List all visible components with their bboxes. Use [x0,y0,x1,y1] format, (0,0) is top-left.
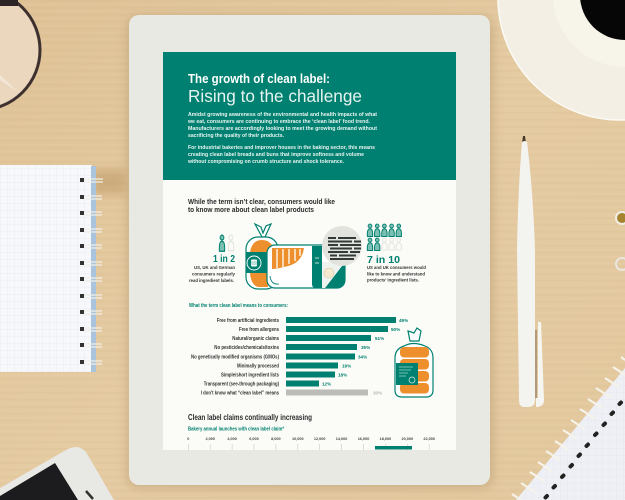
intro text: For industrial bakeries and improver houses in the baking sector, this means [188,145,375,151]
screen [163,52,456,450]
title: The growth of clean label: [188,72,330,86]
intro text: we eat, consumers are continuing to embrace the ‘clean label’ food trend. [187,119,370,125]
values: 19% [342,364,351,368]
intro text: Amidst growing awareness of the environmental and health impacts of what [188,112,377,118]
stat: 1 in 2: US, UK and German [194,265,235,271]
chart axis: launches: 14,000 [336,437,347,441]
coffee cup and saucer [498,0,625,120]
chart axis: launches: 12,000 [314,437,326,441]
title [188,72,362,106]
intro text [187,112,377,165]
chart axis: launches: 8,000 [271,437,281,441]
loaf [272,248,304,269]
pen [517,136,544,407]
glasses [0,0,40,110]
icon: ten people [367,224,401,250]
binder clips [616,212,625,270]
values [322,318,408,396]
chart axis: launches: 20,000 [401,437,413,441]
bar chart: meaning of clean label [191,317,408,396]
row labels: Minimally processed [237,364,279,370]
chart axis: launches: 4,000 [227,437,237,441]
illustration: bread bags and label [246,224,362,289]
subheading: bakery launches: Bakery annual launches with clean label claim* [188,426,285,432]
stat: 1 in 2: read ingredient labels. [189,278,234,284]
bag tie [255,224,271,237]
chart axis: launches: 6,000 [249,437,259,441]
icon: bag of bread rolls [395,328,433,397]
chart axis: launches: 16,000 [358,437,369,441]
intro text: creating clean label breads and buns that improve softness and volume [188,152,364,158]
bars [286,317,396,396]
row labels: Natural/organic claims [232,336,279,342]
row labels: Simple/short ingredient lists [221,372,279,378]
chart axis: launches [187,437,435,450]
icon: two people [219,235,234,251]
chart axis: launches: 18,000 [380,437,391,441]
bar [375,446,412,450]
values: 51% [375,336,384,341]
magnified ingredient list [322,226,362,266]
row labels: No pesticides/chemicals/toxins [214,345,279,351]
section heading: consumers: While the term isn’t clear, consumers would like [188,197,335,206]
stat: 7 in 10 [367,224,426,284]
values: 35% [361,345,370,350]
icon: bread circle [247,256,261,270]
stat: 1 in 2: 1 in 2 [213,253,235,265]
tablet [127,15,493,488]
phone [0,447,114,500]
row labels: Free from allergens [239,327,279,333]
values: 49% [399,318,408,323]
title: Rising to the challenge [188,86,362,106]
stat: 7 in 10: like to know and understand [367,272,425,278]
chart axis: launches: 22,000 [423,437,435,441]
subheading: what clean label means: What the term clean label means to consumers: [189,303,288,309]
notebook left [0,165,126,372]
stat: 7 in 10: 7 in 10 [367,254,400,266]
row labels [191,318,279,396]
stat: 1 in 2 [189,235,235,284]
values: 34% [358,354,367,360]
small bag [267,245,345,288]
row labels: Transparent (see-through packaging) [204,382,279,388]
row labels: I don’t know what “clean label” means [201,390,279,396]
section heading: consumers [188,197,335,214]
intro text: without compromising on crumb structure and shock tolerance. [187,159,344,165]
spiral notebook bottom right [512,357,625,500]
stat: 1 in 2: consumers regularly [192,272,235,278]
intro text: Manufacturers are accordingly looking to meet the growing demand without [188,126,377,132]
section heading: consumers: to know more about clean label products [188,205,314,214]
values: 50% [391,327,400,332]
values: 12% [322,382,331,386]
values: 18% [338,372,347,378]
row labels: Free from artificial ingredients [217,318,279,324]
chart axis: launches: 0 [187,437,189,441]
large bag [246,237,278,289]
teal label panel [312,246,322,288]
heading: claims increasing: Clean label claims continually increasing [188,412,312,422]
intro text: sacrificing the quality of their products. [188,133,284,139]
row labels: No genetically modified organisms (GMOs) [191,354,279,360]
values: 30% [373,390,382,396]
panel: teal header [163,52,456,180]
chart axis: launches: 2,000 [205,437,215,441]
chart axis: launches: 10,000 [292,437,304,441]
stat: 7 in 10: US and UK consumers would [367,265,426,271]
stat: 7 in 10: products’ ingredient lists. [367,278,419,284]
